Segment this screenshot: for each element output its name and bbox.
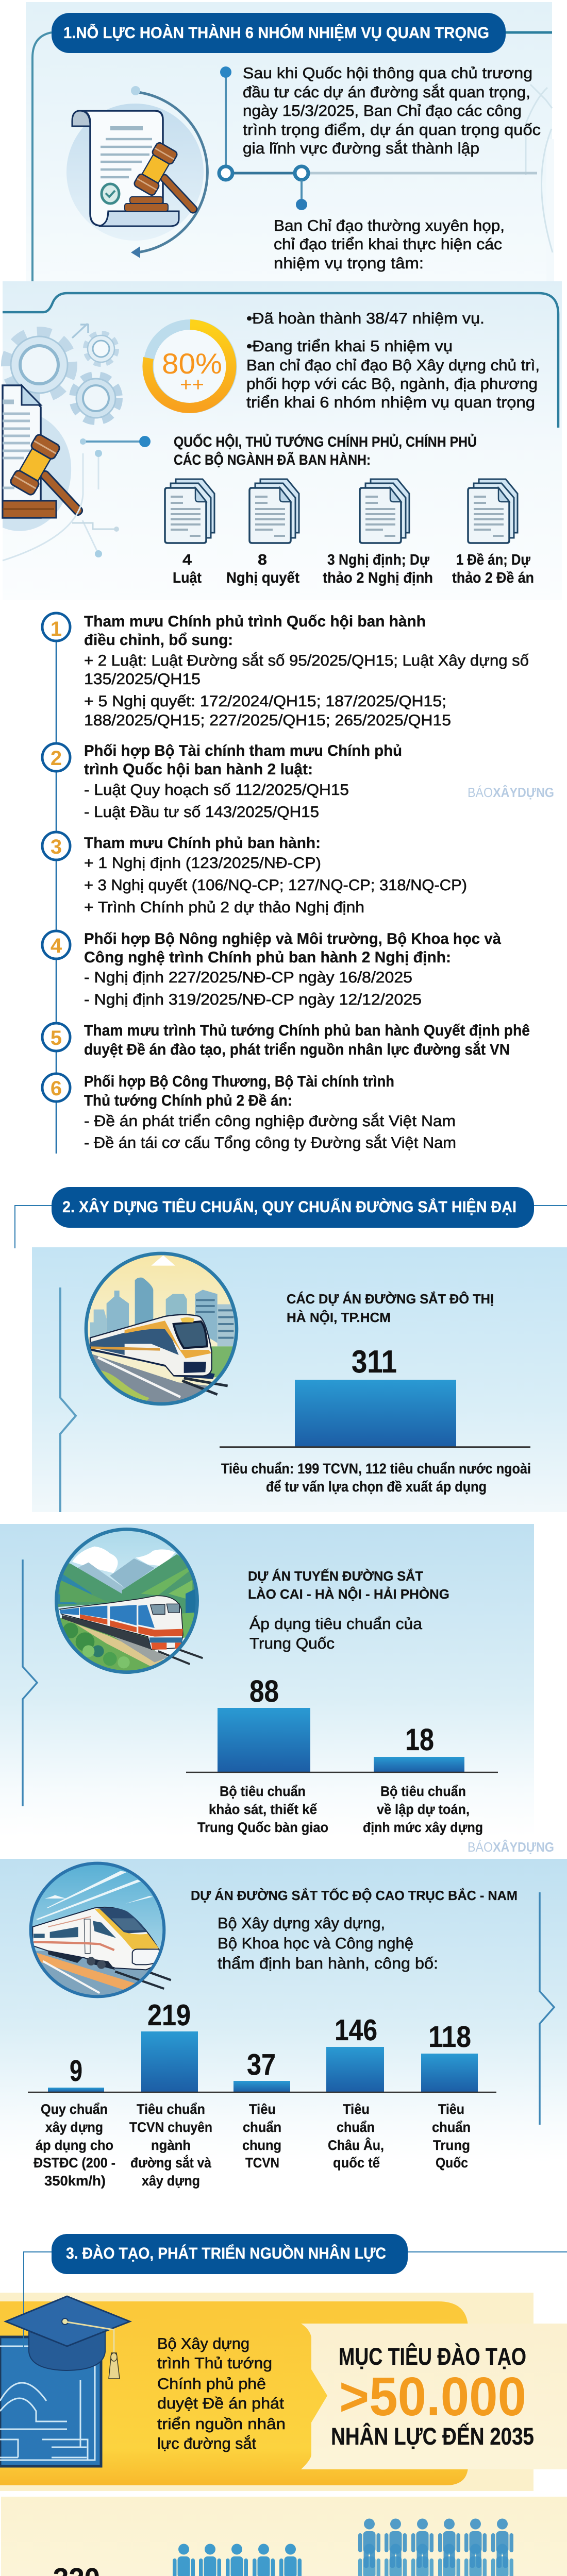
icon: decrees documents: thảo 2 Nghị định [323,570,433,586]
text: progress bullets: •Đã hoàn thành 38/47 nhiệm vụ. [246,310,485,327]
step 3: + 3 Nghị quyết (106/NQ-CP; 127/NQ-CP; 318/NQ-CP) [84,877,467,894]
icon: blueprint [0,2337,101,2466]
step 1: 1 [51,618,62,640]
text: urban standards note [221,1461,531,1495]
icon: 4 laws documents: 4 [182,552,192,568]
text: column labels: Quy chuẩn [41,2102,108,2117]
text: steering committee [274,217,505,272]
icon: graduation cap [6,2296,130,2379]
icon: high speed train [26,1860,175,2004]
text: column labels: ngành [151,2138,191,2153]
text: steering committee: chỉ đạo triển khai thực hiện các [274,236,502,253]
text: progress bullets [246,310,540,411]
connector: text bullets [219,66,537,210]
text: bar labels: Trung Quốc bàn giao [197,1820,328,1835]
step 6: Phối hợp Bộ Công Thương, Bộ Tài chính trình [84,1073,394,1090]
text: ministries note: thẩm định ban hành, công bố: [218,1955,438,1972]
chart: five bars of standards: 146 [335,2013,377,2047]
heading: section 3: 3. ĐÀO TẠO, PHÁT TRIỂN NGUỒN NHÂN LỰC [66,2244,386,2262]
step 3: + 1 Nghị định (123/2025/NĐ-CP) [84,855,321,872]
icon: document and gavel [3,385,151,561]
text: intro paragraph [243,65,541,157]
text: column labels: chuẩn [337,2120,375,2135]
text: urban standards note: Tiêu chuẩn: 199 TCVN, 112 tiêu chuẩn nước ngoài [221,1461,531,1477]
step 2: trình Quốc hội ban hành 2 luật: [84,761,313,778]
text: column labels: Quốc [436,2155,468,2171]
text: column labels: TCVN [245,2155,279,2171]
text: urban project title [287,1291,494,1325]
text: column labels: Tiêu [343,2102,370,2117]
icon: people 2026-2030 [173,2544,302,2576]
step 1 [42,613,529,729]
watermark: BÁOXÂYDỰNG [468,785,554,800]
step 2 [42,742,402,821]
text: column labels [34,2102,471,2189]
step 1: + 2 Luật: Luật Đường sắt số 95/2025/QH15; Luật Xây dựng số [84,652,529,669]
chart: five bars of standards [28,1998,496,2092]
text: applies Chinese standards: Trung Quốc [249,1635,335,1652]
icon: decrees documents [323,479,433,586]
chart: 311 standards bar: 311 [352,1344,397,1380]
icon: scroll document with gavel [66,86,207,258]
text: column labels: Tiêu [438,2102,464,2117]
text: Lao Cai project title: DỰ ÁN TUYẾN ĐƯỜNG SẮT [248,1568,423,1584]
text: progress bullets: triển khai 6 nhóm nhiệm vụ quan trọng [246,394,535,411]
panel: urban railway [32,1247,567,1512]
step 4 [42,930,501,1008]
text: urban project title: HÀ NỘI, TP.HCM [287,1310,391,1325]
heading: section 2 [15,1187,567,1248]
panel: training timeline [1,2497,567,2576]
text: column labels: Châu Âu, [328,2137,384,2153]
chart: 80 percent ring [147,325,232,408]
text: ministry submission: Chính phủ phê [157,2376,266,2393]
text: Lao Cai project title [248,1568,449,1602]
icon: schemes documents: 1 Đề án; Dự [456,552,530,568]
step 2: - Luật Đầu tư số 143/2025/QH15 [84,804,319,821]
step 3: Tham mưu Chính phủ ban hành: [84,835,321,852]
step 5 [42,1022,530,1058]
heading: issued documents [174,433,477,468]
step 3: 3 [51,836,62,858]
step 6: 6 [51,1077,62,1100]
text: column labels: TCVN chuyên [129,2120,212,2135]
heading: section 3 [52,2234,567,2274]
heading: section 1 [52,13,506,53]
icon: 4 laws documents [165,479,214,586]
text: column labels: Trung [433,2138,470,2153]
step 4: Công nghệ trình Chính phủ ban hành 2 Nghị định: [84,949,451,966]
panel: section 1 intro [26,2,554,281]
icon: people 2030-2035 [358,2518,513,2576]
chart: five bars of standards: 9 [70,2054,82,2088]
callout: training target [301,2324,567,2469]
text: ministry submission [157,2335,286,2452]
heading: issued documents: CÁC BỘ NGÀNH ĐÃ BAN HÀNH: [174,451,371,468]
text: progress bullets: •Đang triển khai 5 nhiệm vụ [246,338,453,355]
text: column labels: quốc tế [333,2155,380,2171]
text: intro paragraph: đầu tư các dự án đường sắt quan trọng, [243,83,530,101]
icon: 8 resolutions documents [226,479,299,586]
chart: 311 standards bar [220,1344,530,1447]
text: urban project title: CÁC DỰ ÁN ĐƯỜNG SẮT ĐÔ THỊ [287,1291,494,1307]
chart: 80 percent ring: 80% [162,347,222,380]
step 6: - Đề án tái cơ cấu Tổng công ty Đường sắt Việt Nam [84,1134,456,1151]
step 1: + 5 Nghị quyết: 172/2024/QH15; 187/2025/QH15; [84,693,446,710]
heading: issued documents: QUỐC HỘI, THỦ TƯỚNG CHÍNH PHỦ, CHÍNH PHỦ [174,433,477,450]
text: intro paragraph: Sau khi Quốc hội thông qua chủ trương [243,65,532,82]
panel: training target [0,2252,567,2491]
text: bar labels [197,1784,483,1835]
text: column labels: xây dựng [142,2173,200,2189]
step 3 [42,832,467,916]
step 5: Tham mưu trình Thủ tướng Chính phủ ban hành Quyết định phê [84,1022,530,1039]
chart: 80 percent ring: ++ [180,374,204,396]
step 6: Thủ tướng Chính phủ 2 Đề án: [84,1092,292,1109]
text: progress bullets: Ban chỉ đạo chỉ đạo Bộ Xây dựng chủ trì, [246,357,540,374]
text: ministries note: Bộ Xây dựng xây dựng, [218,1915,385,1932]
text: Lao Cai project title: LÀO CAI - HÀ NỘI - HẢI PHÒNG [248,1586,449,1602]
step 3: + Trình Chính phủ 2 dự thảo Nghị định [84,899,364,916]
text: applies Chinese standards [249,1615,422,1652]
text: column labels: ĐSTĐC (200 - [34,2155,115,2171]
chart: five bars of standards: 118 [428,2020,471,2054]
text: ministry submission: trình Thủ tướng [157,2355,272,2372]
heading: section 2: 2. XÂY DỰNG TIÊU CHUẨN, QUY CHUẨN ĐƯỜNG SẮT HIỆN ĐẠI [62,1198,516,1216]
text: intro paragraph: ngày 15/3/2025, Ban Chỉ đạo các công [243,103,522,120]
text: column labels: chuẩn [243,2120,281,2135]
text: ministry submission: lực đường sắt [157,2435,257,2452]
text: ministry submission: duyệt Đề án phát [157,2395,285,2412]
step 4: Phối hợp Bộ Nông nghiệp và Môi trường, Bộ Khoa học và [84,930,501,947]
icon: metro train [82,1250,241,1408]
chart: 88 and 18 bars: 88 [249,1674,279,1708]
step 6: - Đề án phát triển công nghiệp đường sắt Việt Nam [84,1112,456,1130]
chart: five bars of standards: 37 [247,2048,276,2081]
text: steering committee: nhiệm vụ trọng tâm: [274,255,424,272]
text: intro paragraph: trình trọng điểm, dự án quan trọng quốc [243,122,541,139]
text: progress bullets: phối hợp với các Bộ, ngành, địa phương [246,376,538,393]
chart: 88 and 18 bars [186,1674,498,1772]
icon: 4 laws documents: Luật [173,570,202,586]
step 4: - Nghị định 319/2025/NĐ-CP ngày 12/12/2025 [84,991,422,1008]
text: bar labels: Bộ tiêu chuẩn [380,1784,466,1799]
step 4: - Nghị định 227/2025/NĐ-CP ngày 16/8/2025 [84,969,412,986]
step 5: 5 [51,1027,62,1049]
step 1: điều chỉnh, bổ sung: [84,632,233,649]
text: column labels: Tiêu chuẩn [137,2102,205,2117]
icon: schemes documents: thảo 2 Đề án [452,570,534,586]
text: column labels: xây dựng [45,2120,103,2135]
icon: diesel train [52,1525,206,1676]
text: urban standards note: để tư vấn lựa chọn đề xuất áp dụng [266,1479,487,1495]
text: high speed project title: DỰ ÁN ĐƯỜNG SẮT TỐC ĐỘ CAO TRỤC BẮC - NAM [191,1888,518,1903]
step 2: - Luật Quy hoạch số 112/2025/QH15 [84,782,349,799]
text: column labels: 350km/h) [44,2173,106,2189]
text: bar labels: Bộ tiêu chuẩn [220,1784,306,1799]
step 2: 2 [51,747,62,770]
text: bar labels: khảo sát, thiết kế [209,1802,318,1817]
text: applies Chinese standards: Áp dụng tiêu chuẩn của [249,1615,422,1633]
text: column labels: Tiêu [249,2102,276,2117]
icon: schemes documents [452,479,534,586]
step 1: Tham mưu Chính phủ trình Quốc hội ban hành [84,613,426,630]
text: ministry submission: triển nguồn nhân [157,2416,286,2433]
text: ministries note [218,1915,438,1972]
step 2: Phối hợp Bộ Tài chính tham mưu Chính phủ [84,742,402,759]
step 1: 188/2025/QH15; 227/2025/QH15; 265/2025/QH15 [84,712,451,729]
text: ministries note: Bộ Khoa học và Công nghệ [218,1935,413,1952]
panel: section 1 progress [3,281,562,600]
text: column labels: đường sắt và [130,2155,212,2171]
text: steering committee: Ban Chỉ đạo thường xuyên họp, [274,217,505,234]
icon: gears [7,324,118,420]
watermark: BÁOXÂYDỰNG [468,1839,554,1855]
chart: 88 and 18 bars: 18 [405,1722,434,1757]
panel: North-South high speed railway [0,1859,567,2189]
text: bar labels: định mức xây dựng [363,1820,483,1835]
text: column labels: chuẩn [432,2120,471,2135]
timeline: six tasks [42,613,530,1154]
text: ministry submission: Bộ Xây dựng [157,2335,249,2352]
step 1: 135/2025/QH15 [84,671,201,688]
callout: training target: >50.000 [339,2366,526,2427]
icon: 8 resolutions documents: 8 [258,552,267,568]
icon: decrees documents: 3 Nghị định; Dự [327,552,429,568]
step 6 [42,1073,456,1151]
panel: Lao Cai - Ha Noi - Hai Phong [0,1524,534,1837]
step 5: duyệt Đề án đào tạo, phát triển nguồn nhân lực đường sắt VN [84,1041,510,1058]
step 4: 4 [51,935,62,957]
text: bar labels: về lập dự toán, [377,1802,470,1817]
text: column labels: áp dụng cho [36,2138,113,2153]
text: column labels: chung [242,2138,281,2153]
heading: section 1: 1.NỖ LỰC HOÀN THÀNH 6 NHÓM NHIỆM VỤ QUAN TRỌNG [63,24,489,42]
text: intro paragraph: gia lĩnh vực đường sắt thành lập [243,140,479,157]
icon: 8 resolutions documents: Nghị quyết [226,570,299,586]
chart: five bars of standards: 219 [147,1998,191,2032]
